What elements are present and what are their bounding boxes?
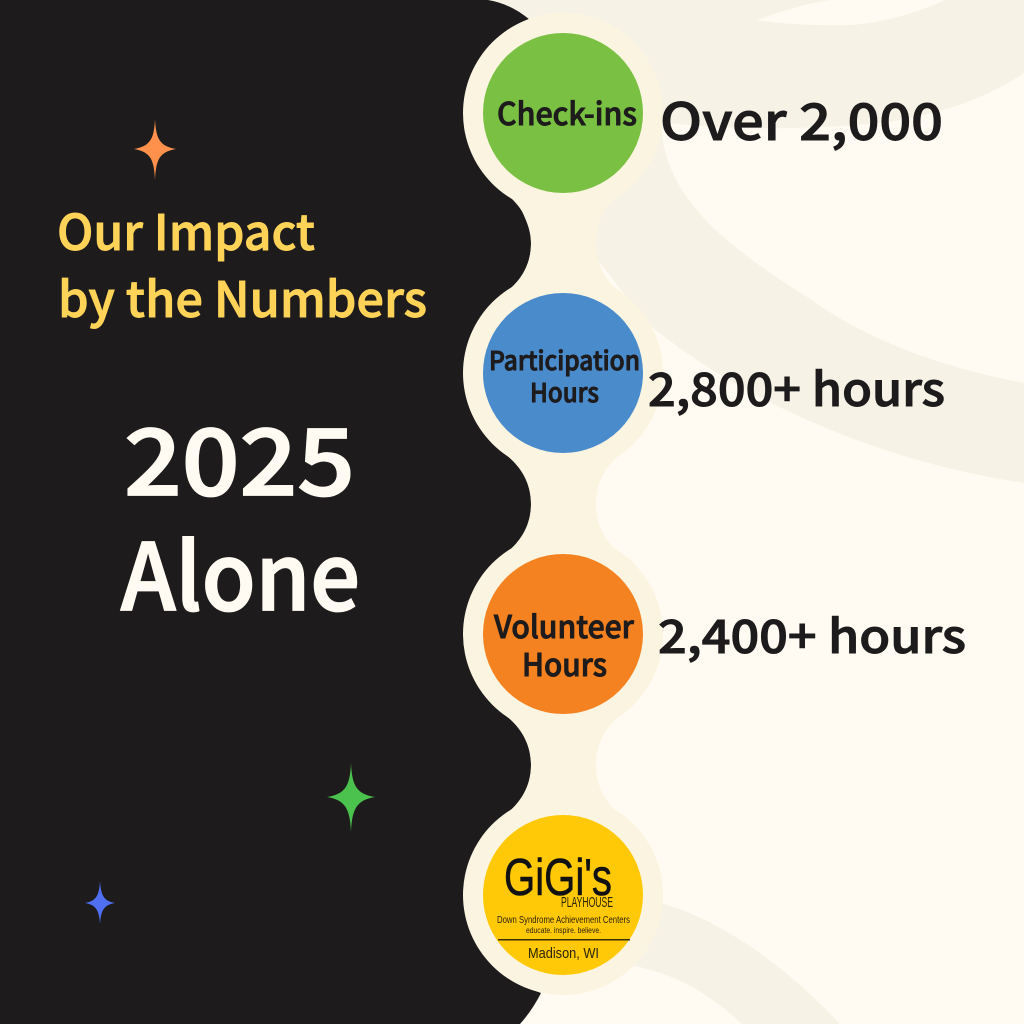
circle: Volunteer Hours: Volunteer: [493, 602, 634, 647]
icon: orange sparkle: [134, 119, 176, 180]
circle: Check-ins: Check-ins: [497, 89, 637, 134]
logo: GiGi's Playhouse Madison: Down Syndrome Achievement Centers: [497, 914, 630, 926]
heading: 2025 Alone: 2025: [124, 389, 355, 522]
heading: Our Impact by the Numbers: by the Numbers: [58, 261, 427, 332]
logo: GiGi's Playhouse Madison: [483, 815, 643, 975]
icon: blue sparkle: [85, 881, 115, 924]
logo: GiGi's Playhouse Madison: educate. inspire. believe.: [526, 926, 601, 935]
heading: 2025 Alone: Alone: [121, 504, 360, 637]
heading: Our Impact by the Numbers: [57, 194, 427, 332]
logo: GiGi's Playhouse Madison: Madison, WI: [528, 946, 599, 962]
halo track connecting the circles: [463, 13, 663, 995]
logo: GiGi's Playhouse Madison: PLAYHOUSE: [561, 894, 613, 911]
stat: Over 2,000: Over 2,000: [660, 81, 943, 155]
circle: Participation Hours: Hours: [530, 373, 599, 410]
circle: Volunteer Hours: [483, 554, 643, 714]
heading: 2025 Alone: [121, 389, 360, 637]
circle: Participation Hours: [483, 293, 643, 453]
circle: Check-ins: [483, 33, 643, 193]
stat: 2,800+ hours: 2,800+ hours: [648, 354, 945, 420]
circle: Participation Hours: Participation: [489, 341, 640, 378]
dark left panel with wavy edge: [0, 0, 541, 1024]
stat: 2,400+ hours: 2,400+ hours: [658, 601, 966, 667]
logo: GiGi's Playhouse Madison: GiGi's: [504, 849, 612, 907]
icon: green sparkle: [327, 763, 375, 832]
heading: Our Impact by the Numbers: Our Impact: [57, 194, 315, 265]
circle: Volunteer Hours: Hours: [522, 640, 607, 685]
